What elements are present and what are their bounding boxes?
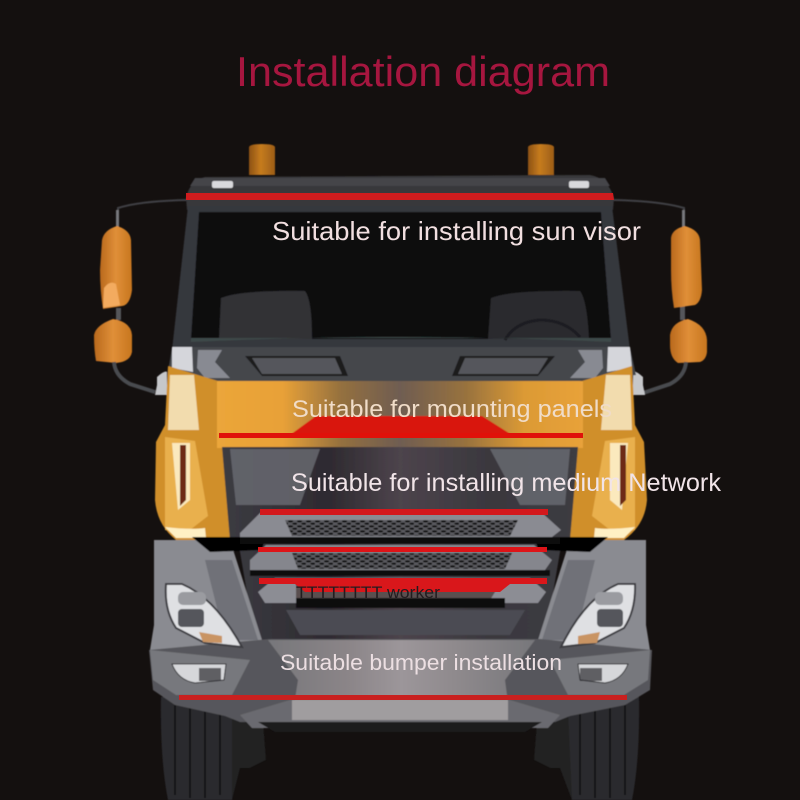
left mirror assembly xyxy=(94,200,187,395)
left seat xyxy=(219,291,312,339)
icon: right roof beacon xyxy=(528,144,554,175)
truck illustration xyxy=(94,144,707,800)
label: bumper: Suitable bumper installation xyxy=(280,650,562,675)
label: medium network: Suitable for installing medium Network xyxy=(291,469,722,497)
icon: left fog lamp xyxy=(172,664,226,683)
icon: left roof beacon xyxy=(249,144,275,175)
icon: right fog lamp xyxy=(578,664,628,683)
tyres xyxy=(161,697,639,800)
cab roof and sun visor xyxy=(186,175,614,210)
red strip: sun visor xyxy=(186,193,614,200)
orange centre panel xyxy=(217,381,583,448)
title: Installation diagram xyxy=(236,48,610,95)
right mirror assembly xyxy=(613,200,707,395)
red strip: medium network middle xyxy=(258,547,547,552)
windshield xyxy=(172,206,630,350)
red strip: mounting panel xyxy=(219,433,583,438)
hood band with vents xyxy=(168,347,636,381)
red strip: bumper xyxy=(179,695,627,700)
label: worker: TTTTTTTT worker xyxy=(296,583,440,602)
grille slats with mesh xyxy=(240,511,561,635)
left orange corner panel xyxy=(155,366,232,540)
front bumper xyxy=(149,639,652,732)
icon: left headlight xyxy=(166,584,242,647)
right orange corner panel xyxy=(568,366,647,540)
red strip: medium network upper xyxy=(260,509,548,515)
steering wheel xyxy=(505,320,580,340)
right seat xyxy=(488,291,589,339)
grille and lower fascia xyxy=(222,447,578,640)
red panel highlight xyxy=(290,416,512,435)
label: mounting panels: Suitable for mounting panels xyxy=(292,396,612,423)
lower cab grey corners xyxy=(150,537,650,650)
red strip: lower grille xyxy=(259,578,547,592)
label: sun visor: Suitable for installing sun visor xyxy=(272,216,641,246)
icon: right headlight xyxy=(561,584,635,647)
